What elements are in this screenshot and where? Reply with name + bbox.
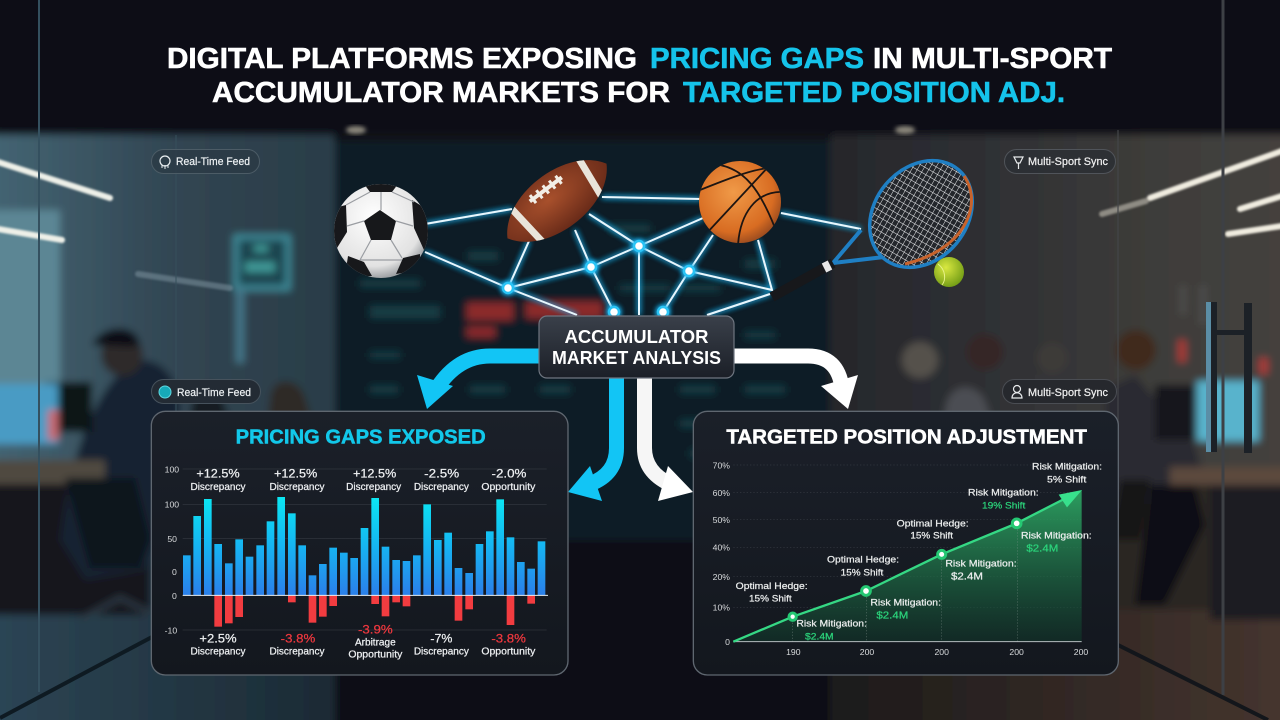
x axis labels: 200 [860, 647, 874, 657]
upper value labels: +12.5% [196, 467, 240, 481]
chart annotations: $2.4M [951, 572, 983, 583]
area line chart [733, 490, 1082, 642]
y axis labels: 70% [713, 461, 730, 471]
chart annotations: $2.4M [805, 631, 834, 641]
panel heading: TARGETED POSITION ADJUSTMENT [726, 427, 1087, 449]
door handle [1206, 302, 1252, 453]
chart annotations: $2.4M [1026, 543, 1058, 554]
chart annotations: 15% Shift [841, 567, 884, 577]
x axis labels: 200 [934, 647, 949, 657]
lower value labels: -7% [430, 631, 452, 645]
bar chart [183, 497, 548, 627]
chart annotations: Risk Mitigation: [945, 559, 1017, 569]
chart annotations [736, 461, 1102, 641]
right people [928, 387, 1023, 542]
x axis labels: 200 [1074, 647, 1088, 657]
tag: multi-sport sync top: Multi-Sport Sync [1028, 156, 1108, 168]
lower value labels: Opportunity [348, 650, 403, 661]
icon: american football [507, 160, 607, 242]
arrow: blue to pricing gaps [417, 356, 540, 409]
upper value labels: -2.5% [424, 467, 459, 481]
chart annotations: Risk Mitigation: [1021, 530, 1092, 540]
chart annotations: Risk Mitigation: [870, 597, 941, 607]
lower value labels: Arbitrage [355, 638, 396, 649]
tag: real-time feed top [152, 150, 260, 174]
network nodes [503, 241, 694, 317]
tag: real-time feed lower [152, 380, 260, 404]
chart annotations: Optimal Hedge: [827, 554, 899, 564]
tag: real-time feed lower: Real-Time Feed [177, 387, 251, 399]
lower value labels [190, 622, 536, 661]
lower value labels: +2.5% [199, 631, 237, 645]
x axis labels [786, 647, 1088, 657]
chart annotations: 15% Shift [910, 531, 953, 541]
title: DIGITAL PLATFORMS EXPOSING [167, 43, 637, 75]
y axis labels: 100 [165, 464, 179, 474]
y axis labels [165, 464, 179, 635]
title: PRICING GAPS [650, 43, 864, 75]
arrow: white centre to targeted position [644, 376, 693, 501]
arrow: white to targeted position [733, 356, 858, 409]
chart annotations: $2.4M [876, 610, 908, 621]
chart annotations: Risk Mitigation: [1032, 461, 1102, 471]
y axis labels: 0 [725, 637, 730, 647]
lower value labels: Discrepancy [190, 646, 246, 657]
lower value labels: Discrepancy [269, 646, 325, 657]
icon: soccer ball [330, 184, 430, 278]
upper value labels: -2.0% [491, 467, 527, 481]
chart annotations: 5% Shift [1047, 474, 1087, 484]
hub: accumulator market analysis: MARKET ANALYSIS [552, 348, 721, 368]
hub: accumulator market analysis [539, 316, 734, 378]
y axis labels: 100 [165, 500, 179, 510]
upper value labels: +12.5% [274, 467, 317, 481]
y axis labels: -10 [165, 625, 177, 635]
lower value labels: Discrepancy [414, 646, 469, 657]
upper value labels: Discrepancy [414, 482, 469, 493]
y axis labels [713, 461, 730, 647]
y axis labels: 50 [167, 534, 177, 544]
tag: multi-sport sync lower [1002, 380, 1116, 404]
y axis labels: 40% [713, 543, 730, 553]
y axis labels: 50% [713, 515, 730, 525]
y axis labels: 60% [713, 488, 730, 498]
upper value labels: Discrepancy [190, 482, 246, 493]
y axis labels: 10% [713, 603, 730, 613]
upper value labels [190, 467, 536, 493]
title [167, 43, 1112, 109]
upper value labels: Discrepancy [269, 482, 325, 493]
panel: targeted position adjustment [693, 411, 1118, 675]
network connections [425, 197, 861, 315]
title: ACCUMULATOR MARKETS FOR [212, 77, 670, 109]
x axis labels: 190 [786, 647, 801, 657]
hub: accumulator market analysis: ACCUMULATOR [564, 327, 708, 347]
upper value labels: Discrepancy [346, 482, 401, 493]
icon: tennis racket and ball [772, 140, 994, 297]
chart annotations: Optimal Hedge: [897, 518, 969, 528]
icon: basketball [699, 161, 785, 245]
chart annotations: Risk Mitigation: [796, 618, 867, 628]
ceiling [0, 0, 1280, 135]
chart annotations: Optimal Hedge: [736, 581, 808, 591]
chart annotations: 19% Shift [982, 500, 1026, 510]
tag: real-time feed top: Real-Time Feed [176, 156, 250, 168]
lower value labels: -3.8% [491, 631, 526, 645]
y axis labels: 0 [172, 591, 177, 601]
upper value labels: +12.5% [353, 467, 396, 481]
ceiling lights [0, 151, 1280, 288]
tag: multi-sport sync lower: Multi-Sport Sync [1028, 387, 1108, 399]
teal wall sign [236, 237, 288, 288]
chart annotations: 15% Shift [749, 594, 792, 604]
left people [189, 384, 249, 445]
y axis labels: 0 [172, 567, 177, 577]
screen rows [360, 225, 785, 459]
chart annotations: Risk Mitigation: [968, 487, 1039, 497]
lower value labels: Opportunity [481, 646, 536, 657]
arrow: blue centre to pricing gaps [568, 376, 616, 501]
lower value labels: -3.8% [281, 631, 315, 645]
x axis labels: 200 [1009, 647, 1024, 657]
y axis labels: 20% [713, 572, 730, 582]
panel heading: PRICING GAPS EXPOSED [236, 427, 486, 449]
lower value labels: -3.9% [358, 622, 393, 636]
title: IN MULTI-SPORT [873, 43, 1112, 75]
title: TARGETED POSITION ADJ. [683, 77, 1065, 109]
tag: multi-sport sync top [1004, 150, 1116, 174]
upper value labels: Opportunity [481, 482, 536, 493]
panel: pricing gaps exposed [151, 411, 568, 675]
